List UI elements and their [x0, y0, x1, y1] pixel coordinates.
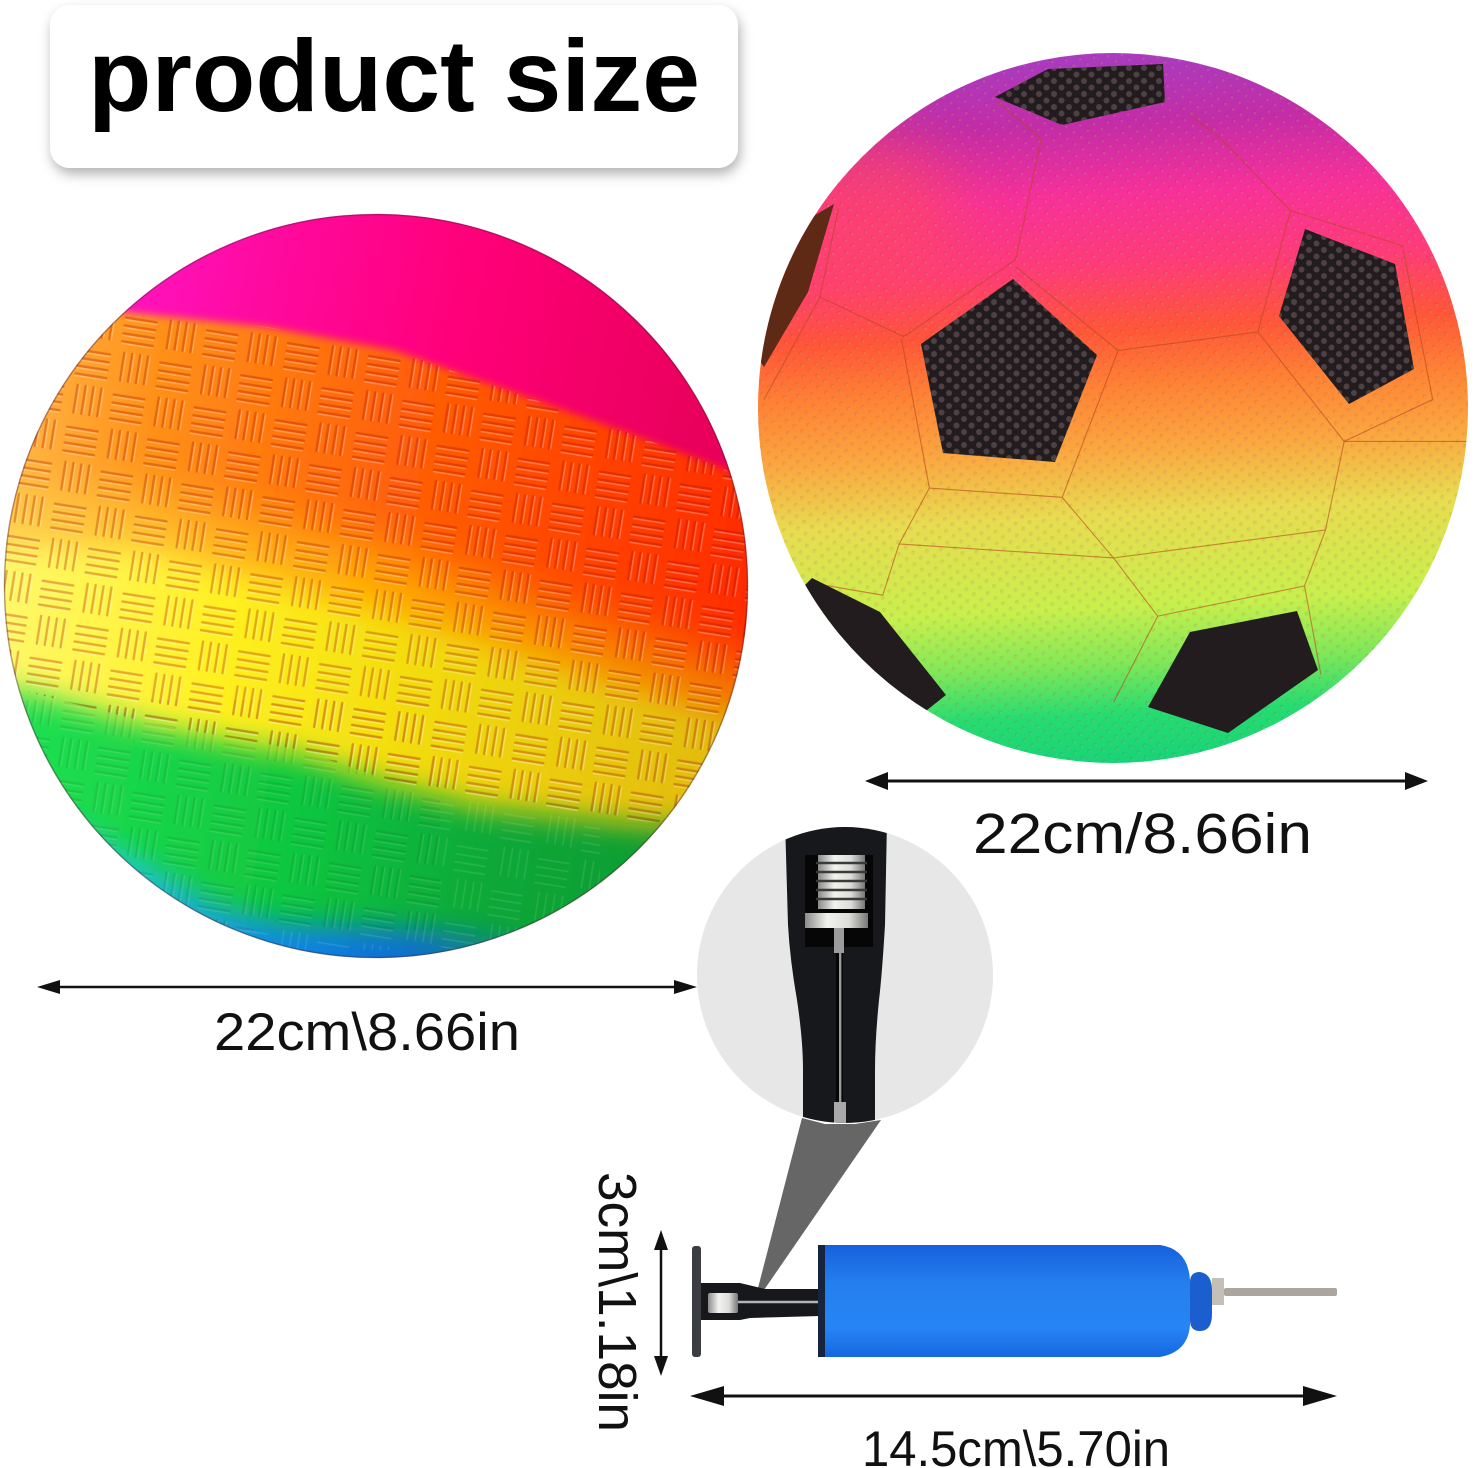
soccer ball seams [764, 101, 1468, 702]
title card: product size: product size [88, 19, 700, 133]
black pentagon panels [745, 64, 1414, 733]
title card: product size [50, 5, 738, 168]
rainbow playground ball [4, 214, 748, 958]
magnified pump nozzle detail [697, 820, 993, 1127]
label: pump height: 3cm\1.18in [587, 1172, 647, 1432]
zoom cone connecting lens to pump [758, 1118, 881, 1290]
arrow: soccer ball diameter [865, 772, 1428, 790]
arrow: playground ball diameter [37, 980, 697, 994]
arrow: pump length [690, 1386, 1337, 1406]
hand pump [692, 1245, 1337, 1357]
label: playground ball size: 22cm\8.66in [214, 1003, 520, 1062]
label: soccer ball size: 22cm/8.66in [973, 802, 1312, 866]
dimple texture on top panels [921, 64, 1414, 462]
arrow: pump height [654, 1230, 668, 1376]
rainbow soccer ball [745, 50, 1476, 770]
